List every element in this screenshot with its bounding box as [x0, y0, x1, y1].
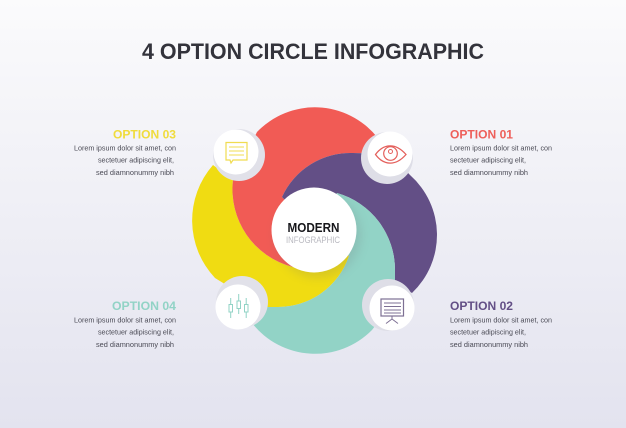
text: option 01: sectetuer adipiscing elit, [450, 156, 526, 164]
segment: teal [252, 193, 395, 354]
circular swirl diagram [192, 107, 437, 354]
text: option 01 [450, 130, 552, 177]
text: option 01: sed diamnonummy nibh [450, 168, 528, 177]
text: option 04: OPTION 04 [112, 301, 177, 313]
text: option 03 [74, 130, 176, 177]
text: option 04: sed diamnonummy nibh [96, 340, 174, 349]
text: option 01: OPTION 01 [450, 130, 514, 142]
text: option 03: sed diamnonummy nibh [96, 168, 174, 177]
text: option 03: sectetuer adipiscing elit, [98, 156, 174, 164]
text: option 04: sectetuer adipiscing elit, [98, 328, 174, 336]
icon: speech bubble [213, 129, 265, 181]
text: option 02: OPTION 02 [450, 301, 513, 313]
center circle [272, 188, 356, 272]
segment: purple [282, 153, 437, 293]
title: 4 OPTION CIRCLE INFOGRAPHIC [142, 39, 484, 64]
text: option 01: Lorem ipsum dolor sit amet, con [450, 144, 552, 152]
text: option 02: Lorem ipsum dolor sit amet, con [450, 316, 552, 324]
icon: eye [361, 132, 413, 184]
icon: sliders [216, 276, 268, 330]
text: option 02 [450, 301, 552, 349]
center heading: MODERN [288, 221, 340, 235]
segment: yellow [192, 165, 349, 307]
segment: red [232, 107, 390, 267]
center shadow [275, 192, 361, 278]
text: option 02: sectetuer adipiscing elit, [450, 328, 526, 336]
text: option 02: sed diamnonummy nibh [450, 340, 528, 349]
text: option 03: OPTION 03 [113, 130, 176, 142]
center subheading: INFOGRAPHIC [286, 235, 341, 245]
text: option 03: Lorem ipsum dolor sit amet, con [74, 144, 176, 152]
text: option 04: Lorem ipsum dolor sit amet, con [74, 316, 176, 324]
text: option 04 [74, 301, 177, 349]
icon: presentation board [362, 279, 414, 331]
